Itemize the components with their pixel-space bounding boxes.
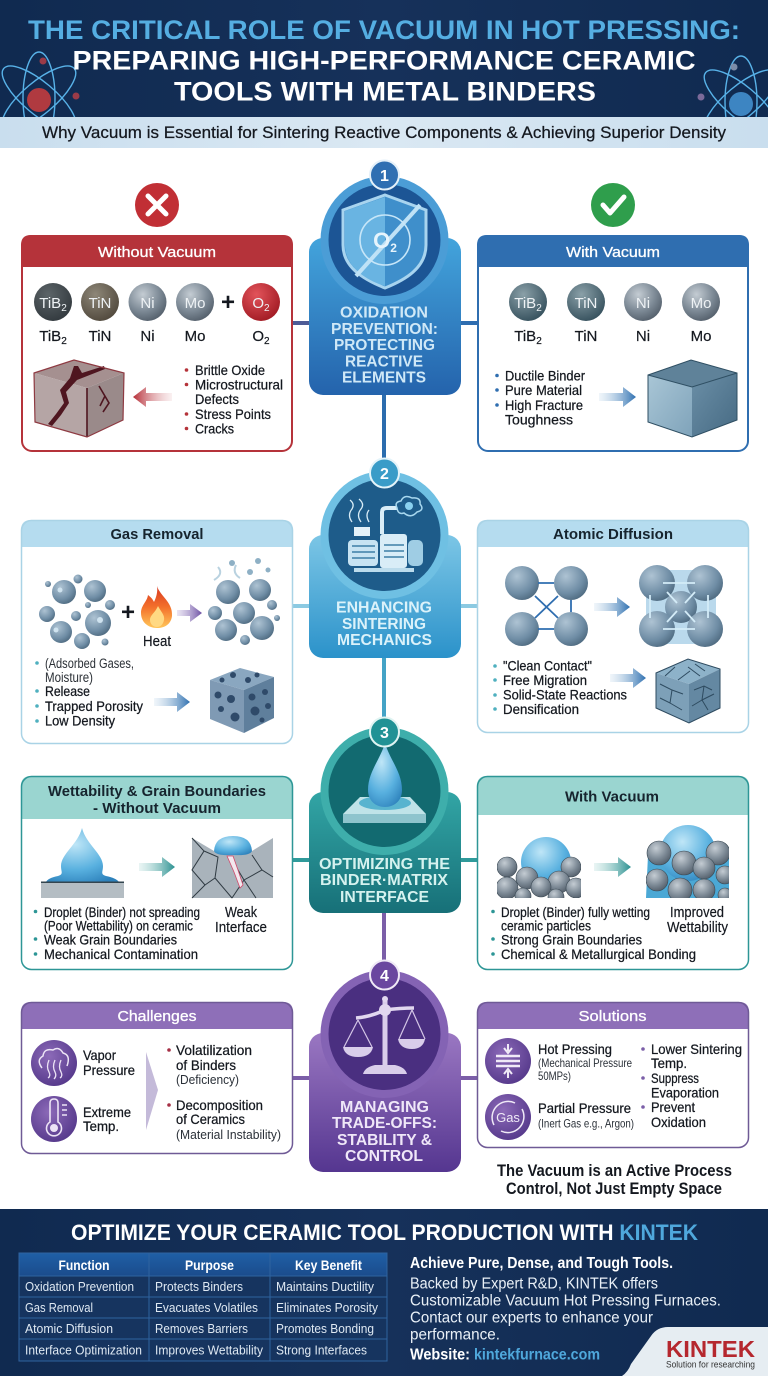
icon: red X (135, 183, 179, 227)
arrow (594, 597, 630, 617)
bullet list (641, 1041, 742, 1130)
section heading: OXIDATION (340, 304, 428, 322)
element labels (39, 328, 270, 347)
tagline: The Vacuum is an Active Process (497, 1162, 732, 1180)
section heading: ELEMENTS (342, 370, 426, 386)
icon: inert gas: Gas (496, 1110, 520, 1125)
bullet list: Moisture) (45, 670, 93, 685)
number badge 4 (370, 960, 399, 990)
partial pressure text: (Inert Gas e.g., Argon) (538, 1116, 634, 1130)
section heading: BINDER·MATRIX (320, 872, 448, 889)
arrow (154, 692, 190, 712)
number badge 1 (370, 160, 399, 190)
icon: shield with O2: 2 (390, 241, 397, 255)
element labels: TiN (89, 328, 111, 345)
improved wettability label: Improved (670, 904, 724, 921)
bullet list: Solid-State Reactions (503, 686, 627, 702)
chevron (146, 1052, 158, 1130)
summary table: Key Benefit (295, 1257, 362, 1273)
number badge 4: 4 (380, 968, 389, 985)
icon: balance scale (343, 996, 425, 1074)
panel: challenges (21, 1002, 293, 1154)
weak interface label: Interface (215, 919, 267, 936)
subtitle band: Why Vacuum is Essential for Sintering Reactive Components & Achieving Superior Density (42, 123, 726, 142)
bullet list (185, 362, 283, 436)
center card 3: binder matrix interface (309, 718, 461, 913)
element spheres: Ni (140, 295, 155, 312)
bullet list: "Clean Contact" (503, 658, 592, 674)
bullet list: Pure Material (505, 382, 582, 398)
element labels: Mo (185, 328, 205, 345)
bullet list: Temp. (651, 1055, 687, 1071)
section heading: PROTECTING (334, 337, 435, 354)
panel: solutions: Solutions (578, 1008, 646, 1025)
element spheres: 2 (61, 303, 67, 314)
panel: without vacuum: Without Vacuum (98, 244, 216, 261)
bullet list: Weak Grain Boundaries (44, 932, 177, 948)
bullet list: Microstructural (195, 376, 283, 392)
bullet list: Densification (503, 701, 579, 717)
bullet list: Ductile Binder (505, 368, 585, 384)
bullet list (495, 368, 585, 428)
section heading: OPTIMIZING THE (319, 856, 450, 873)
arrow (594, 857, 631, 877)
element spheres: + (221, 289, 235, 316)
element labels: 2 (264, 336, 270, 347)
element labels: Ni (140, 328, 155, 345)
bullet list: ceramic particles (501, 918, 591, 934)
bullet list: Droplet (Binder) fully wetting (501, 905, 650, 920)
bullet list: Defects (195, 391, 239, 407)
summary table: Eliminates Porosity (276, 1300, 378, 1315)
bullet list: Oxidation (651, 1114, 706, 1130)
title (28, 15, 740, 106)
panel: gas removal: Gas Removal (110, 526, 204, 543)
bullet list: High Fracture (505, 397, 583, 413)
number badge 3 (370, 718, 399, 746)
call to action text: Contact our experts to enhance your (410, 1310, 653, 1326)
element spheres (509, 283, 720, 321)
section heading: REACTIVE (345, 354, 423, 370)
plus sign: + (121, 599, 135, 626)
element labels: 2 (536, 336, 542, 347)
summary table: Promotes Bonding (276, 1321, 374, 1336)
section heading: MANAGING (340, 1099, 429, 1116)
element spheres: Mo (185, 295, 205, 312)
icon: bonded atoms (639, 565, 723, 647)
section heading (332, 1099, 437, 1165)
bullet list: Release (45, 683, 90, 699)
footer heading: OPTIMIZE YOUR CERAMIC TOOL PRODUCTION WITH KINTEK (71, 1220, 698, 1245)
panel: atomic diffusion: Atomic Diffusion (553, 526, 673, 543)
partial pressure text: Partial Pressure (538, 1100, 631, 1116)
icon: flame (141, 586, 172, 628)
element labels: O (252, 328, 264, 345)
improved wettability label (667, 904, 728, 936)
section heading: STABILITY & (337, 1132, 432, 1149)
footer (0, 1209, 768, 1376)
section heading: INTERFACE (340, 889, 429, 906)
panel: challenges: Challenges (118, 1008, 196, 1025)
heat label: Heat (143, 633, 172, 650)
bullet list: Toughness (505, 412, 573, 428)
icon: weak grain interface (192, 836, 273, 898)
summary table: Protects Binders (155, 1279, 243, 1294)
center card 1: oxidation prevention (309, 160, 461, 395)
tagline (497, 1162, 732, 1198)
panel: wettability without vacuum: - Without Vacuum (93, 800, 221, 817)
bullet list: Strong Grain Boundaries (501, 932, 642, 948)
bullet list: Volatilization (176, 1042, 252, 1058)
bullet list: of Binders (176, 1057, 236, 1073)
icon: dense grain cube (656, 659, 720, 723)
summary table: Maintains Ductility (276, 1279, 374, 1294)
arrow (133, 387, 172, 407)
section heading (319, 856, 450, 906)
section heading: MECHANICS (337, 632, 432, 649)
summary table: Purpose (185, 1257, 234, 1273)
icon: shield with O2: O (373, 228, 390, 253)
summary table: Interface Optimization (25, 1342, 142, 1358)
call to action text: performance. (410, 1326, 500, 1344)
element spheres: TiN (575, 295, 597, 312)
summary table: Atomic Diffusion (25, 1321, 113, 1336)
improved wettability label: Wettability (667, 919, 728, 936)
bullet list (491, 905, 696, 962)
icon: porous cube (210, 668, 274, 733)
icon: separated atoms with diffusion arrows (505, 566, 588, 646)
bullet list: (Poor Wettability) on ceramic (44, 918, 193, 934)
element labels: TiB (514, 328, 536, 345)
bullet list (34, 905, 200, 962)
vapor pressure label: Pressure (83, 1062, 135, 1078)
call to action text: Achieve Pure, Dense, and Tough Tools. (410, 1255, 673, 1272)
title: TOOLS WITH METAL BINDERS (174, 76, 596, 106)
element spheres: TiB (39, 295, 61, 312)
bullet list: Chemical & Metallurgical Bonding (501, 946, 696, 962)
arrow (599, 387, 636, 407)
panel: atomic diffusion (477, 520, 749, 732)
subtitle band (0, 117, 768, 148)
panel: wettability without vacuum: Wettability & Grain Boundaries (48, 783, 266, 800)
call to action text: kintekfurnace.com (474, 1346, 600, 1364)
section heading (331, 304, 438, 386)
summary table: Function (58, 1257, 110, 1273)
element spheres: 2 (264, 303, 270, 314)
section heading: ENHANCING (336, 600, 432, 616)
center card 4: managing trade-offs (309, 960, 461, 1172)
bullet list: Mechanical Contamination (44, 946, 198, 962)
summary table: Evacuates Volatiles (155, 1300, 258, 1315)
call to action text: Customizable Vacuum Hot Pressing Furnaces. (410, 1292, 721, 1310)
icon: blue atom (698, 55, 768, 117)
extreme temp label: Temp. (83, 1118, 119, 1134)
arrow (139, 857, 175, 877)
KINTEK logo: Solution for researching (666, 1360, 755, 1370)
hot pressing text (538, 1041, 632, 1083)
bullet list: Trapped Porosity (45, 698, 143, 714)
icon: droplet on particles (497, 837, 581, 898)
center card 2: sintering mechanics (309, 458, 461, 658)
section heading (336, 600, 432, 649)
header banner (0, 0, 768, 117)
icon: red atom (2, 51, 80, 117)
icon: shield with O2 (343, 195, 426, 288)
number badge 2: 2 (380, 466, 389, 483)
number badge 1: 1 (380, 168, 389, 185)
panel: gas removal (21, 520, 293, 744)
panel: wettability with vacuum: With Vacuum (565, 788, 659, 806)
tagline: Control, Not Just Empty Space (506, 1180, 722, 1198)
element spheres: Ni (636, 295, 650, 312)
element spheres: TiN (89, 295, 111, 312)
call to action text (410, 1255, 721, 1364)
icon: mechanical press (485, 1038, 531, 1084)
bullet list: Evaporation (651, 1084, 719, 1100)
extreme temp label (83, 1104, 131, 1134)
bullet list: (Adsorbed Gases, (45, 656, 134, 671)
call to action text: Backed by Expert R&D, KINTEK offers (410, 1276, 658, 1292)
bullet list: (Material Instability) (176, 1127, 281, 1142)
element labels: 2 (61, 336, 67, 347)
icon: inert gas (485, 1094, 531, 1140)
title: PREPARING HIGH-PERFORMANCE CERAMIC (72, 46, 696, 76)
weak interface label: Weak (225, 904, 257, 921)
icon: gas-laden particles (39, 574, 115, 649)
hot pressing text: (Mechanical Pressure (538, 1056, 632, 1070)
bullet list: Cracks (195, 420, 234, 436)
section heading: SINTERING (342, 616, 426, 633)
icon: droplet on plate (343, 743, 426, 823)
element spheres: TiB (514, 295, 536, 312)
panel: solutions (477, 1002, 749, 1148)
bullet list: Suppress (651, 1070, 699, 1086)
bullet list: Low Density (45, 712, 115, 728)
summary table: Improves Wettability (155, 1342, 263, 1358)
bullet list: Prevent (651, 1099, 695, 1115)
icon: fully wetted particles (646, 825, 729, 898)
bullet list: Free Migration (503, 672, 587, 688)
connector lines (293, 321, 477, 1080)
element labels: TiN (575, 328, 597, 345)
panel: without vacuum (21, 235, 293, 451)
summary table (19, 1253, 387, 1361)
icon: solid cube (648, 360, 737, 437)
number badge 2 (370, 458, 399, 488)
bullet list (167, 1042, 281, 1142)
call to action text: Website: (410, 1346, 470, 1364)
hot pressing text: Hot Pressing (538, 1041, 612, 1057)
partial pressure text (538, 1100, 634, 1130)
section heading: TRADE-OFFS: (332, 1115, 437, 1132)
number badge 3: 3 (380, 725, 389, 742)
bullet list: Stress Points (195, 406, 271, 422)
icon: vapor cloud (31, 1040, 77, 1086)
element labels: Mo (691, 328, 711, 345)
summary table: Oxidation Prevention (25, 1279, 134, 1294)
bullet list: Decomposition (176, 1097, 263, 1113)
icon: thermometer (31, 1096, 77, 1142)
element labels (514, 328, 711, 347)
weak interface label (215, 904, 267, 936)
summary table: Gas Removal (25, 1300, 93, 1315)
summary table: Strong Interfaces (276, 1342, 367, 1358)
element spheres: O (252, 295, 264, 312)
section heading: PREVENTION: (331, 321, 438, 338)
element spheres: 2 (536, 303, 542, 314)
summary table: Removes Barriers (155, 1321, 248, 1336)
panel: with vacuum (477, 235, 749, 451)
panel: with vacuum: With Vacuum (566, 244, 660, 261)
icon: vacuum pump (348, 497, 423, 572)
vapor pressure label (83, 1047, 135, 1078)
panel: wettability with vacuum (477, 776, 749, 970)
element spheres: Mo (691, 295, 711, 312)
section heading: CONTROL (345, 1148, 423, 1165)
icon: cracked cube (34, 360, 124, 437)
arrow (610, 668, 646, 688)
arrow (177, 604, 202, 622)
bullet list: Droplet (Binder) not spreading (44, 905, 200, 920)
KINTEK logo: KINTEK (666, 1336, 755, 1362)
icon: degassing particles (208, 558, 280, 645)
extreme temp label: Extreme (83, 1104, 131, 1120)
element labels: Ni (636, 328, 650, 345)
hot pressing text: 50MPs) (538, 1069, 571, 1083)
icon: droplet not spreading (41, 828, 124, 898)
icon: green check (591, 183, 635, 227)
vapor pressure label: Vapor (83, 1047, 116, 1063)
bullet list: Lower Sintering (651, 1041, 742, 1057)
title: THE CRITICAL ROLE OF VACUUM IN HOT PRESSING: (28, 15, 740, 45)
KINTEK logo (622, 1327, 768, 1376)
bullet list (493, 658, 627, 717)
bullet list (35, 656, 143, 728)
bullet list: of Ceramics (176, 1111, 245, 1127)
panel: wettability without vacuum (21, 776, 293, 970)
element spheres (34, 283, 280, 321)
element labels: TiB (39, 328, 61, 345)
bullet list: Brittle Oxide (195, 362, 265, 378)
bullet list: (Deficiency) (176, 1072, 239, 1087)
